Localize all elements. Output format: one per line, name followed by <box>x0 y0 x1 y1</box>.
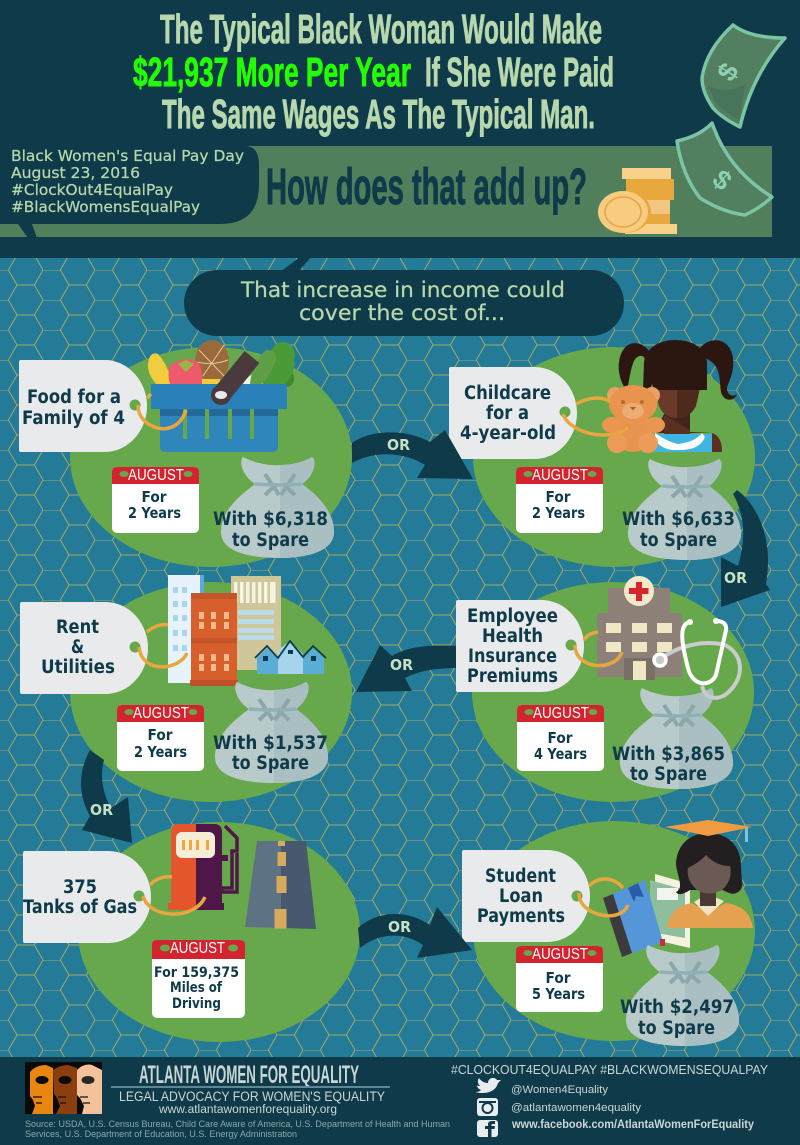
facebook url: www.facebook.com/AtlantaWomenForEquality <box>511 1117 754 1131</box>
icon: falling bill top <box>702 25 785 127</box>
instagram handle: @atlantawomen4equality <box>511 1102 642 1114</box>
callout: equal pay day <box>0 146 259 238</box>
calendar: 2 years: For <box>142 488 167 506</box>
price tag: student loans: Student <box>485 866 556 887</box>
title: If She Were Paid <box>425 49 614 95</box>
money bag: 6633: to Spare <box>640 530 717 551</box>
money bag: 1537: With $1,537 <box>213 733 328 754</box>
arrow: food to childcare <box>352 430 473 479</box>
arrow: rent to gas <box>81 750 132 843</box>
price tag: food: Family of 4 <box>22 408 125 429</box>
price tag: childcare: Childcare <box>464 383 551 404</box>
calendar: 5 years <box>516 946 603 1012</box>
price tag: student loans <box>462 850 628 942</box>
icon: falling bill bottom <box>677 123 772 215</box>
callout: equal pay day: #BlackWomensEqualPay <box>11 198 200 216</box>
calendar: 2 years <box>117 705 204 771</box>
source: Services, U.S. Department of Education, U.S. Energy Administration <box>25 1129 297 1139</box>
calendar: 4 years <box>517 705 604 771</box>
organisation name: ATLANTA WOMEN FOR EQUALITY <box>139 1061 359 1089</box>
money bag: 3865 <box>612 688 733 789</box>
calendar: 2 years: AUGUST <box>128 467 184 484</box>
footer <box>0 1057 800 1145</box>
logo: three faces <box>25 1062 102 1114</box>
icon: hospital <box>597 576 682 680</box>
calendar: miles of driving: AUGUST <box>170 940 225 957</box>
calendar: 4 years: 4 Years <box>534 745 587 763</box>
price tag: childcare <box>449 367 628 459</box>
calendar: miles of driving: Miles of <box>170 980 223 996</box>
callout: equal pay day: August 23, 2016 <box>11 164 140 182</box>
icon: stethoscope <box>654 618 740 698</box>
money bag: 3865: to Spare <box>630 764 707 785</box>
price tag: health insurance: Insurance <box>468 646 557 667</box>
calendar: 5 years: 5 Years <box>532 985 585 1003</box>
source <box>25 1119 450 1139</box>
icon: grocery basket <box>148 340 295 452</box>
icon: facebook <box>477 1120 498 1137</box>
arrow: food to childcare: OR <box>387 436 410 454</box>
money bag: 2497: With $2,497 <box>620 997 734 1018</box>
tagline: LEGAL ADVOCACY FOR WOMEN'S EQUALITY <box>119 1089 385 1104</box>
icon: falling bill bottom: $ <box>707 164 737 196</box>
price tag: health insurance: Employee <box>467 606 558 627</box>
icon: twitter <box>475 1078 501 1093</box>
arrow: gas to student: OR <box>388 918 411 936</box>
calendar: miles of driving <box>152 940 245 1018</box>
calendar: miles of driving: Driving <box>172 996 221 1012</box>
icon: gas pump <box>168 824 237 910</box>
calendar: 2 years: For <box>148 726 173 744</box>
twitter handle: @Women4Equality <box>511 1084 609 1096</box>
money bag: 6318: to Spare <box>232 530 309 551</box>
arrow: gas to student <box>358 907 472 958</box>
money bag: 2497 <box>620 945 739 1046</box>
calendar: 2 years: AUGUST <box>133 705 189 722</box>
callout: equal pay day: #ClockOut4EqualPay <box>11 181 173 199</box>
panel: health insurance <box>456 576 754 802</box>
hashtags: #CLOCKOUT4EQUALPAY #BLACKWOMENSEQUALPAY <box>451 1062 768 1077</box>
banner: how does that add up <box>0 146 772 237</box>
price tag: rent: Utilities <box>41 657 115 678</box>
icon: coins <box>598 168 677 234</box>
price tag: rent <box>20 602 187 694</box>
price tag: gas: 375 <box>63 877 97 898</box>
panel: childcare <box>449 340 755 567</box>
callout: that increase in income: cover the cost of... <box>299 301 505 326</box>
calendar: 2 years: For <box>546 488 571 506</box>
calendar: 5 years: For <box>546 969 571 987</box>
price tag: student loans: Loan <box>499 886 543 907</box>
money bag: 3865: With $3,865 <box>612 744 725 765</box>
title <box>133 6 614 137</box>
icon: girl with teddy bear <box>602 340 737 453</box>
price tag: health insurance <box>456 600 622 692</box>
icon: graduate <box>665 820 753 928</box>
callout: that increase in income <box>184 257 624 336</box>
calendar: 2 years <box>516 467 603 533</box>
price tag: gas: Tanks of Gas <box>23 897 137 918</box>
callout: equal pay day: Black Women's Equal Pay Day <box>11 147 244 165</box>
icon: instagram <box>477 1098 498 1116</box>
price tag: food: Food for a <box>27 387 121 408</box>
calendar: 5 years: AUGUST <box>532 946 588 963</box>
price tag: gas <box>23 851 205 943</box>
website: www.atlantawomenforequality.org <box>158 1104 337 1116</box>
money bag: 1537 <box>213 682 328 783</box>
price tag: food <box>19 360 186 452</box>
calendar: 4 years: For <box>548 729 573 747</box>
price tag: student loans: Payments <box>477 906 565 927</box>
callout: that increase in income: That increase in income could <box>240 278 565 303</box>
price tag: health insurance: Health <box>482 626 543 647</box>
icon: road <box>245 841 316 929</box>
arrow: childcare to health: OR <box>724 569 747 587</box>
money bag: 1537: to Spare <box>232 753 309 774</box>
calendar: 2 years <box>112 467 199 533</box>
price tag: rent: & <box>71 637 84 658</box>
arrow: rent to gas: OR <box>90 801 113 819</box>
title: $21,937 More Per Year <box>133 49 411 95</box>
price tag: health insurance: Premiums <box>467 666 558 687</box>
icon: books <box>603 874 690 957</box>
money bag: 6318 <box>213 457 334 558</box>
calendar: 2 years: 2 Years <box>128 504 181 522</box>
money bag: 6633 <box>622 459 741 560</box>
calendar: 2 years: 2 Years <box>134 743 187 761</box>
calendar: 4 years: AUGUST <box>533 705 589 722</box>
calendar: 2 years: AUGUST <box>532 467 588 484</box>
price tag: rent: Rent <box>56 617 99 638</box>
price tag: childcare: 4-year-old <box>460 423 556 444</box>
calendar: miles of driving: For 159,375 <box>154 965 239 981</box>
arrow: health to rent: OR <box>390 656 413 674</box>
money bag: 6633: With $6,633 <box>622 509 735 530</box>
arrow: health to rent <box>356 645 456 692</box>
source: Source: USDA, U.S. Census Bureau, Child Care Aware of America, U.S. Department of Health and Human <box>25 1119 450 1129</box>
money bag: 2497: to Spare <box>638 1018 715 1039</box>
price tag: childcare: for a <box>486 403 529 424</box>
hexagon pattern <box>0 258 800 1057</box>
icon: buildings <box>168 575 326 686</box>
panel: gas <box>23 822 360 1042</box>
money bag: 6318: With $6,318 <box>213 509 328 530</box>
panel: rent <box>20 575 352 802</box>
panel: student loans <box>462 820 755 1046</box>
panel: food <box>19 340 352 567</box>
calendar: 2 years: 2 Years <box>532 504 585 522</box>
arrow: childcare to health <box>721 490 770 607</box>
icon: falling bill top: $ <box>711 58 745 86</box>
